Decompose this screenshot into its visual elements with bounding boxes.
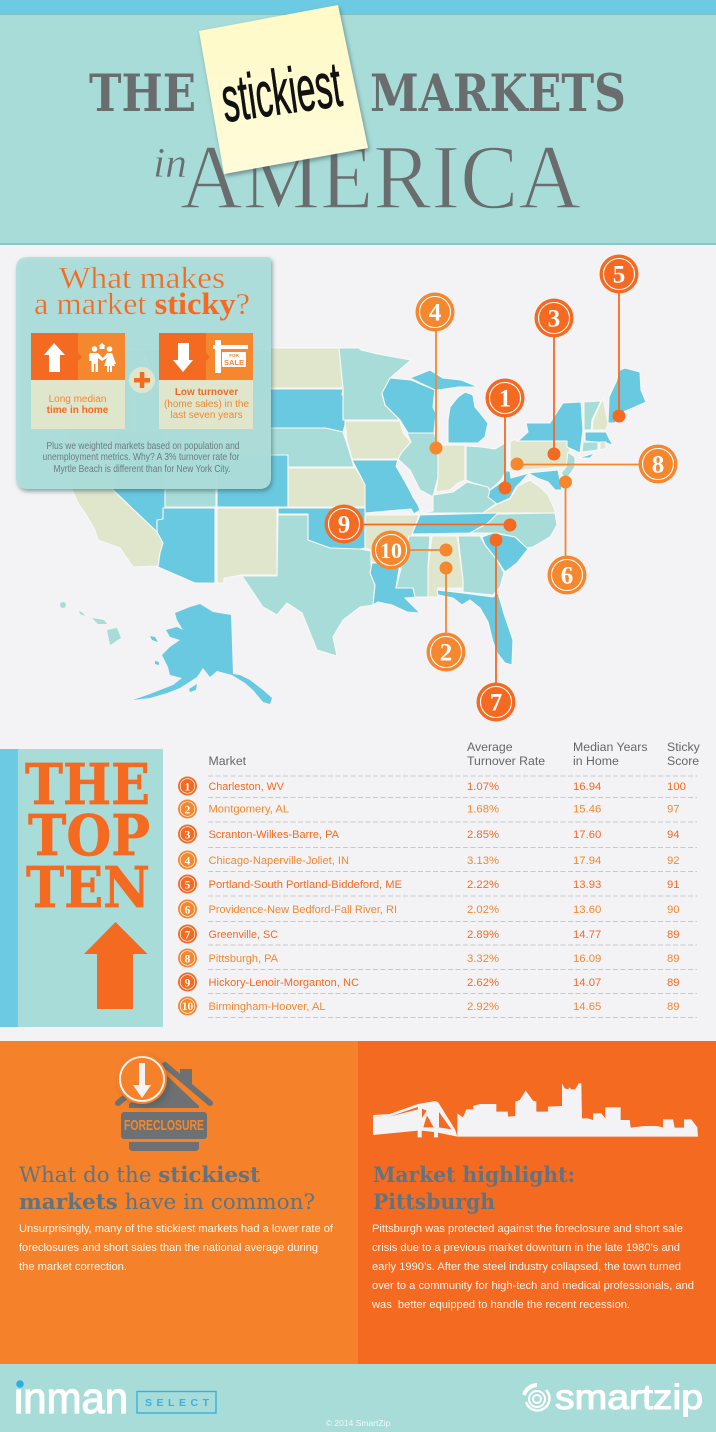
row 3: 3 bbox=[185, 830, 191, 842]
row 3: Scranton-Wilkes-Barre, PA bbox=[208, 829, 339, 841]
row 1: 1 bbox=[185, 782, 191, 794]
row 5: 2.22% bbox=[467, 879, 499, 891]
row 9: Hickory-Lenoir-Morganton, NC bbox=[208, 977, 359, 989]
table header: Market bbox=[208, 754, 247, 768]
row 6: 6 bbox=[185, 904, 191, 916]
row 5: 13.93 bbox=[573, 879, 601, 891]
row 9 bbox=[178, 972, 680, 992]
box: low turnover: Low turnover bbox=[175, 387, 238, 398]
row 2: Montgomery, AL bbox=[208, 804, 289, 816]
row 9: 2.62% bbox=[467, 977, 499, 989]
row 1: 16.94 bbox=[573, 781, 601, 793]
pin 7: 7 bbox=[490, 690, 502, 716]
pin 3: 3 bbox=[548, 306, 560, 332]
row 2: 15.46 bbox=[573, 804, 601, 816]
icon: for sale sign: SALE bbox=[224, 358, 244, 367]
row 9: 89 bbox=[667, 977, 680, 989]
row 6: 90 bbox=[667, 904, 680, 916]
row 3: 2.85% bbox=[467, 829, 499, 841]
icon: for sale sign: FOR bbox=[229, 353, 239, 358]
row 5: 91 bbox=[667, 879, 680, 891]
table header: Turnover Rate bbox=[467, 754, 545, 768]
header banner bbox=[0, 0, 716, 245]
icon: foreclosure house: FORECLOSURE bbox=[124, 1118, 204, 1134]
row 1: Charleston, WV bbox=[208, 781, 284, 793]
table header: Median Years bbox=[573, 740, 648, 754]
row 4: Chicago-Naperville-Joliet, IN bbox=[208, 855, 349, 867]
icon: for sale sign bbox=[213, 340, 248, 373]
title: MARKETS bbox=[370, 64, 626, 124]
map: Alaska bbox=[133, 604, 272, 704]
table header: in Home bbox=[573, 754, 619, 768]
row 8: Pittsburgh, PA bbox=[208, 953, 278, 965]
row 3: 94 bbox=[667, 829, 680, 841]
row 6: 2.02% bbox=[467, 904, 499, 916]
pin 8: 8 bbox=[652, 452, 664, 478]
row 8: 3.32% bbox=[467, 953, 499, 965]
common heading: markets have in common? bbox=[19, 1189, 315, 1214]
highlight heading bbox=[373, 1162, 575, 1214]
row 6 bbox=[178, 900, 680, 918]
row 10: 10 bbox=[182, 1001, 194, 1013]
panel note: Plus we weighted markets based on population and bbox=[46, 440, 240, 452]
table dashed rules bbox=[208, 776, 697, 1018]
sticky note bbox=[199, 5, 368, 174]
common body text: foreclosures and short sales than the national average during bbox=[19, 1242, 318, 1254]
row 4: 17.94 bbox=[573, 855, 601, 867]
pin 8 bbox=[510, 444, 678, 484]
pin 10: 10 bbox=[380, 538, 402, 563]
pin 2: 2 bbox=[440, 640, 452, 666]
common body text: Unsurprisingly, many of the stickiest markets had a lower rate of bbox=[19, 1223, 334, 1235]
sticky note: stickiest bbox=[217, 48, 346, 136]
highlight heading: Pittsburgh bbox=[373, 1189, 495, 1214]
panel note: Myrtle Beach is different than for New York City. bbox=[54, 463, 230, 475]
pin 4: 4 bbox=[429, 300, 442, 326]
pin 6 bbox=[548, 476, 586, 594]
row 10: 89 bbox=[667, 1001, 680, 1013]
box: long median time in home bbox=[31, 333, 125, 429]
row 6: 13.60 bbox=[573, 904, 601, 916]
pin 4 bbox=[416, 292, 454, 454]
table header: Sticky bbox=[667, 740, 701, 754]
box: long median time in home: time in home bbox=[47, 405, 109, 416]
row 10: 2.92% bbox=[467, 1001, 499, 1013]
panel note bbox=[42, 440, 240, 475]
row 7: 14.77 bbox=[573, 929, 601, 941]
highlight body text: Pittsburgh was protected against the foreclosure and short sale bbox=[372, 1223, 683, 1235]
table header bbox=[208, 740, 701, 768]
icon: family with house bbox=[89, 343, 116, 372]
pin 6: 6 bbox=[561, 562, 573, 590]
highlight body text bbox=[371, 1223, 694, 1311]
highlight heading: Market highlight: bbox=[373, 1162, 575, 1187]
pin 5 bbox=[600, 254, 638, 422]
row 9: 9 bbox=[185, 978, 191, 990]
title bbox=[89, 64, 626, 228]
row 7: 2.89% bbox=[467, 929, 499, 941]
row 4: 3.13% bbox=[467, 855, 499, 867]
US map bbox=[60, 348, 646, 704]
copyright: © 2014 SmartZip bbox=[326, 1418, 390, 1428]
row 2: 2 bbox=[185, 804, 191, 816]
row 4 bbox=[178, 850, 680, 870]
row 3: 17.60 bbox=[573, 829, 601, 841]
pin 9 bbox=[324, 504, 516, 544]
row 9: 14.07 bbox=[573, 977, 601, 989]
logo: select: SELECT bbox=[145, 1397, 210, 1409]
box: low turnover: (home sales) in the bbox=[164, 399, 249, 410]
row 7: Greenville, SC bbox=[208, 929, 278, 941]
icon: big up arrow bbox=[84, 922, 148, 1009]
title: AMERICA bbox=[180, 126, 581, 228]
pin 5: 5 bbox=[613, 262, 625, 288]
row 10 bbox=[178, 996, 680, 1016]
table header: Average bbox=[467, 740, 513, 754]
panel heading bbox=[34, 260, 250, 321]
panel: market highlight pittsburgh bbox=[358, 1041, 716, 1364]
row 4: 92 bbox=[667, 855, 680, 867]
row 2: 1.68% bbox=[467, 804, 499, 816]
pin 1 bbox=[486, 378, 524, 494]
title: THE bbox=[89, 64, 196, 124]
highlight body text: early 1990’s. After the steel industry collapsed, the town turned bbox=[372, 1261, 681, 1273]
footer bbox=[0, 1364, 716, 1432]
row 5: Portland-South Portland-Biddeford, ME bbox=[208, 879, 402, 891]
pin 3 bbox=[534, 298, 574, 460]
pin 10 bbox=[372, 530, 452, 570]
pin 9: 9 bbox=[338, 512, 350, 538]
icon: down arrow bbox=[173, 343, 193, 372]
table rows bbox=[178, 776, 686, 1016]
row 4: 4 bbox=[185, 856, 191, 868]
row 2: 97 bbox=[667, 804, 680, 816]
panel heading: a market sticky? bbox=[34, 286, 250, 321]
row 5 bbox=[178, 874, 680, 894]
row 6: Providence-New Bedford-Fall River, RI bbox=[208, 904, 397, 916]
row 8: 16.09 bbox=[573, 953, 601, 965]
common heading bbox=[19, 1162, 315, 1214]
top ten heading: TOP bbox=[28, 803, 150, 869]
panel: what makes a market sticky bbox=[16, 257, 271, 489]
pin 1: 1 bbox=[499, 386, 511, 412]
row 2 bbox=[178, 800, 680, 818]
row 7 bbox=[178, 924, 680, 944]
logo: inman: inman bbox=[14, 1374, 128, 1423]
row 10: 14.65 bbox=[573, 1001, 601, 1013]
pin 7 bbox=[476, 534, 516, 722]
pin 2 bbox=[426, 562, 466, 672]
top ten heading: THE bbox=[25, 752, 150, 818]
panel heading: What makes bbox=[59, 260, 225, 295]
box: low turnover bbox=[159, 333, 253, 429]
row 5: 5 bbox=[185, 880, 191, 892]
row 8 bbox=[178, 948, 680, 968]
logo: smartzip: smartzip bbox=[555, 1378, 703, 1417]
box: low turnover: last seven years bbox=[170, 410, 243, 421]
panel: what do the stickiest markets have in common bbox=[0, 1041, 358, 1364]
highlight body text: crisis due to a previous market downturn in the late 1980’s and bbox=[372, 1242, 680, 1254]
top ten heading bbox=[25, 752, 150, 921]
row 7: 89 bbox=[667, 929, 680, 941]
highlight body text: was better equipped to handle the recent recession. bbox=[371, 1299, 630, 1311]
map pins bbox=[324, 254, 678, 722]
panel note: unemployment metrics. Why? A 3% turnover rate for bbox=[42, 451, 240, 463]
row 8: 89 bbox=[667, 953, 680, 965]
highlight body text: over to a community for high-tech and medical professionals, and bbox=[372, 1280, 694, 1292]
row 10: Birmingham-Hoover, AL bbox=[208, 1001, 326, 1013]
common body text: the market correction. bbox=[19, 1261, 127, 1273]
row 3 bbox=[178, 824, 680, 844]
row 7: 7 bbox=[185, 930, 191, 942]
plus icon bbox=[129, 367, 155, 393]
panel: the top ten bbox=[0, 749, 163, 1027]
icon: pittsburgh skyline bbox=[373, 1083, 698, 1137]
row 1: 1.07% bbox=[467, 781, 499, 793]
top ten heading: TEN bbox=[26, 855, 150, 921]
row 8: 8 bbox=[185, 954, 191, 966]
logo: select bbox=[137, 1392, 216, 1413]
icon: foreclosure house bbox=[117, 1054, 210, 1151]
title: in bbox=[153, 141, 187, 187]
common body text bbox=[19, 1223, 334, 1273]
row 1 bbox=[178, 776, 686, 796]
row 1: 100 bbox=[667, 781, 686, 793]
common heading: What do the stickiest bbox=[19, 1162, 260, 1187]
map: Hawaii bbox=[60, 602, 121, 645]
box: long median time in home: Long median bbox=[49, 394, 106, 405]
table header: Score bbox=[667, 754, 699, 768]
icon: up arrow bbox=[44, 343, 65, 372]
